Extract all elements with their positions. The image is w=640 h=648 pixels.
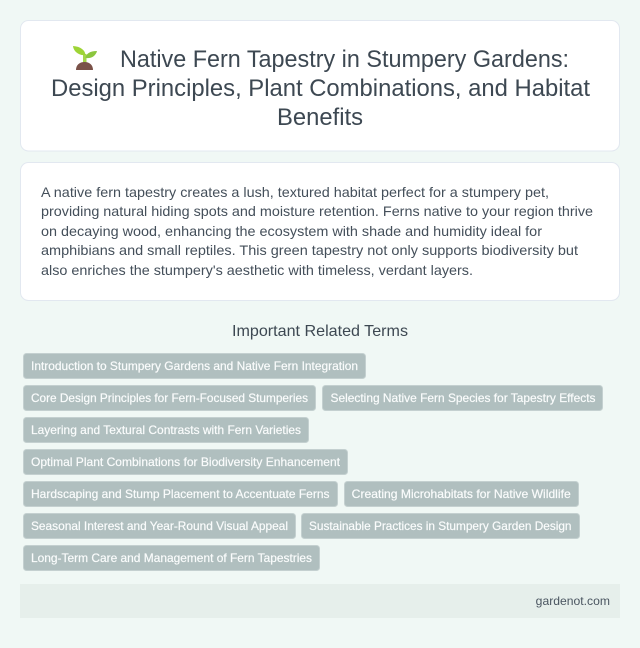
- text block: description: also enriches the stumpery's aesthetic with timeless, verdant layers.: [41, 262, 473, 278]
- tag: hardscaping: Hardscaping and Stump Placement to Accentuate Ferns: [31, 487, 330, 501]
- text block: description: A native fern tapestry creates a lush, textured habitat perfect for a stumpery pet,: [41, 184, 549, 200]
- title: [51, 46, 590, 131]
- tag: layering: Layering and Textural Contrasts with Fern Varieties: [31, 423, 301, 437]
- footer: [20, 584, 620, 618]
- icon: seedling: [73, 46, 97, 70]
- tag: microhabitats: [344, 482, 578, 506]
- tag: core design principles: [24, 386, 316, 410]
- tag: hardscaping: [24, 482, 338, 506]
- tag: seasonal interest: Seasonal Interest and Year-Round Visual Appeal: [31, 519, 288, 533]
- tag: sustainable practices: Sustainable Practices in Stumpery Garden Design: [309, 519, 572, 533]
- tag: plant combinations: Optimal Plant Combinations for Biodiversity Enhancement: [31, 455, 341, 469]
- tag: plant combinations: [24, 450, 348, 474]
- text block: description: providing natural hiding spots and moisture retention. Ferns native to your region thrive: [41, 203, 593, 219]
- footer: gardenot.com: [536, 594, 610, 608]
- tag: selecting species: [322, 386, 602, 410]
- tag: long-term care: Long-Term Care and Management of Fern Tapestries: [31, 551, 312, 565]
- tag: seasonal interest: [24, 514, 296, 538]
- heading: related terms: Important Related Terms: [232, 323, 408, 340]
- tag: introduction: [24, 354, 366, 378]
- title: Design Principles, Plant Combinations, and Habitat: [51, 75, 590, 102]
- tag: selecting species: Selecting Native Fern Species for Tapestry Effects: [330, 391, 596, 405]
- tag: microhabitats: Creating Microhabitats for Native Wildlife: [352, 487, 571, 501]
- title: Native Fern Tapestry in Stumpery Gardens:: [120, 46, 569, 73]
- tag: sustainable practices: [302, 514, 580, 538]
- tag: introduction: Introduction to Stumpery Gardens and Native Fern Integration: [31, 359, 358, 373]
- tag: long-term care: [24, 546, 320, 570]
- panel: description: [20, 162, 620, 300]
- title: Benefits: [277, 104, 363, 131]
- tag: layering: [24, 418, 308, 442]
- text block: description: amphibians and small reptiles. This green tapestry not only supports biodiversity but: [41, 242, 578, 258]
- text block: description: [41, 184, 593, 278]
- panel: title card: [20, 20, 620, 151]
- text block: description: on decaying wood, enhancing the ecosystem with shade and humidity ideal for: [41, 223, 542, 239]
- tag: core design principles: Core Design Principles for Fern-Focused Stumperies: [31, 391, 308, 405]
